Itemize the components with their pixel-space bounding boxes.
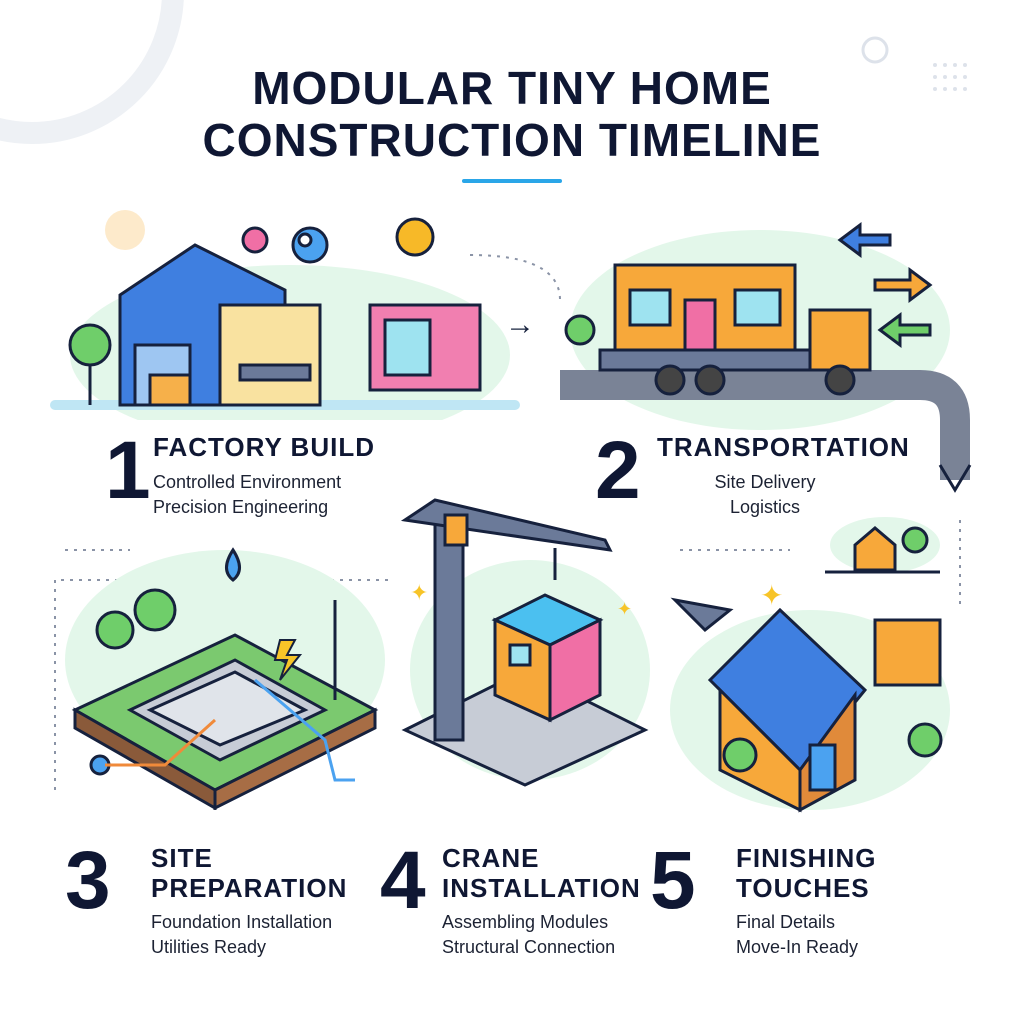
step 5 text: [650, 835, 876, 957]
panel 4: crane installation illustration: ✦: [617, 599, 632, 619]
step 1 text: Precision Engineering: [153, 497, 328, 517]
step 1 text: 1: [105, 425, 151, 516]
step 2 text: 2: [595, 425, 641, 516]
step 2 text: Site Delivery: [714, 472, 816, 492]
decorative dot grid: [862, 36, 967, 91]
step 3 text: PREPARATION: [151, 873, 347, 903]
step 5 text: Final Details: [736, 912, 835, 932]
step 4 text: 4: [380, 835, 426, 926]
title underline: [462, 179, 562, 183]
step 4 text: Assembling Modules: [442, 912, 608, 932]
step 5 text: Move-In Ready: [736, 937, 858, 957]
step 4 text: CRANE: [442, 843, 539, 873]
panel 4: crane installation illustration: ✦: [410, 580, 428, 605]
step 5 text: 5: [650, 835, 696, 926]
step 3 text: Utilities Ready: [151, 937, 266, 957]
step 2 text: TRANSPORTATION: [657, 432, 910, 462]
panel 4: crane installation illustration: [401, 498, 650, 787]
step 2 text: Logistics: [730, 497, 800, 517]
panel 5: finishing touches illustration: [670, 580, 950, 812]
step 1 text: [105, 425, 375, 517]
step 2 text: [595, 425, 910, 517]
title: [202, 62, 821, 166]
panel 1: factory build illustration: [50, 210, 520, 420]
step 5 text: FINISHING: [736, 843, 876, 873]
step 3 text: 3: [65, 835, 111, 926]
step 3 text: SITE: [151, 843, 213, 873]
step 4 text: Structural Connection: [442, 937, 615, 957]
step 3 text: [65, 835, 347, 957]
step 4 text: INSTALLATION: [442, 873, 641, 903]
step 1 text: Controlled Environment: [153, 472, 341, 492]
panel 3: site preparation illustration: [65, 547, 385, 810]
step 4 text: [380, 835, 641, 957]
arrow: 1 to 2: →: [505, 308, 535, 341]
step 5 text: TOUCHES: [736, 873, 870, 903]
step 3 text: Foundation Installation: [151, 912, 332, 932]
panel 5: finishing touches illustration: ✦: [760, 580, 783, 611]
title: CONSTRUCTION TIMELINE: [202, 114, 821, 166]
decorative corner arc: [0, 0, 184, 144]
icon: small house destination: [825, 517, 940, 574]
step 1 text: FACTORY BUILD: [153, 432, 375, 462]
panel 2: transportation illustration: [560, 222, 972, 493]
title: MODULAR TINY HOME: [252, 62, 772, 114]
